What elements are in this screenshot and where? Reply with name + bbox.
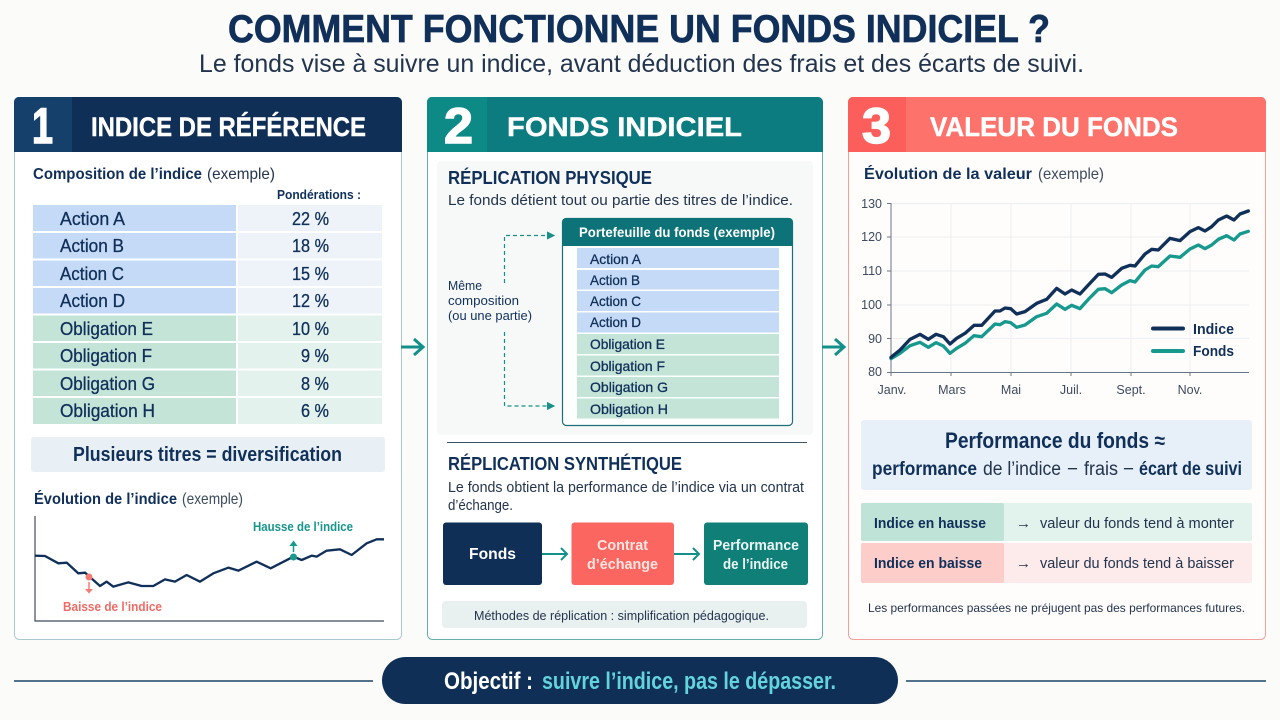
arrow: fonds to contrat — [542, 548, 567, 560]
diversification callout: Plusieurs titres = diversification — [73, 444, 342, 466]
falling index row: Indice en baisse — [874, 555, 982, 572]
decline marker: Baisse de l’indice — [63, 599, 162, 614]
subtitle: Le fonds vise à suivre un indice, avant déduction des frais et des écarts de suivi. — [199, 50, 1084, 78]
composition table: 10 % — [292, 319, 329, 339]
disclaimer: Les performances passées ne préjugent pas des performances futures. — [868, 601, 1245, 615]
rise marker — [253, 519, 353, 560]
flow box: performance de l'indice — [704, 522, 808, 585]
fund portfolio table: Obligation F — [590, 358, 665, 374]
index series — [891, 211, 1248, 357]
falling index row — [861, 543, 1252, 583]
y-axis labels: 100 — [861, 298, 882, 312]
fund portfolio table — [562, 218, 793, 426]
y-axis labels: 120 — [861, 230, 882, 244]
performance formula box: performance — [872, 459, 977, 480]
note on replication methods — [442, 601, 807, 628]
composition table: Action B — [60, 236, 124, 256]
index evolution heading — [34, 489, 243, 508]
arrow: panel 1 to panel 2 — [401, 339, 423, 355]
panel header 2 — [427, 97, 823, 154]
index line chart — [35, 516, 384, 621]
same composition label: (ou une partie) — [448, 308, 532, 323]
fund portfolio table: Obligation E — [590, 336, 665, 352]
physical replication section — [437, 161, 813, 435]
rising index row: → — [1016, 515, 1031, 532]
performance formula box: − — [1067, 459, 1078, 480]
value evolution heading — [864, 164, 1104, 183]
x-axis labels — [878, 383, 1202, 397]
objective banner: suivre l’indice, pas le dépasser. — [542, 668, 836, 695]
y-axis labels: 130 — [861, 197, 882, 211]
y-axis labels — [861, 197, 882, 379]
composition table: 6 % — [301, 401, 329, 421]
performance formula box: − — [1123, 459, 1134, 480]
composition table: Obligation F — [60, 346, 152, 366]
fund portfolio table: Obligation G — [590, 379, 668, 395]
panel header 1: INDICE DE RÉFÉRENCE — [91, 111, 366, 142]
panel header 2: FONDS INDICIEL — [507, 112, 742, 142]
flow box: fonds — [443, 522, 542, 585]
same composition label: composition — [448, 293, 519, 308]
chart legend: Indice — [1193, 322, 1234, 338]
chart legend: Fonds — [1193, 344, 1234, 360]
x-axis labels: Janv. — [878, 383, 906, 397]
physical replication section: Le fonds détient tout ou partie des titres de l’indice. — [448, 192, 793, 209]
composition table: 18 % — [292, 236, 329, 256]
composition table: 8 % — [301, 374, 329, 394]
composition table: 22 % — [292, 209, 329, 229]
x-axis labels: Juil. — [1060, 383, 1082, 397]
composition table — [33, 205, 382, 424]
dashed connector arrows — [504, 236, 554, 406]
panel: valeur du fonds — [848, 97, 1266, 640]
flow box: performance de l'indice: de l’indice — [723, 556, 788, 573]
x-axis labels: Mai — [1001, 383, 1021, 397]
fund portfolio table: Action D — [590, 314, 641, 330]
composition table: Obligation E — [60, 319, 153, 339]
fund portfolio table: Obligation H — [590, 401, 668, 417]
composition heading: (exemple) — [207, 166, 275, 183]
falling index row: → — [1016, 555, 1031, 572]
composition table: Action A — [60, 209, 125, 229]
physical replication section: RÉPLICATION PHYSIQUE — [448, 167, 652, 188]
y-axis labels: 110 — [862, 264, 882, 278]
panel: fonds indiciel — [427, 97, 823, 640]
performance formula box: frais — [1084, 459, 1118, 480]
synthetic replication section: Le fonds obtient la performance de l’indice via un contrat — [448, 480, 804, 496]
synthetic replication section: RÉPLICATION SYNTHÉTIQUE — [448, 453, 682, 474]
panel header 3 — [848, 97, 1266, 154]
y-axis labels: 80 — [868, 365, 882, 379]
objective banner — [382, 657, 898, 704]
synthetic replication section — [442, 453, 808, 628]
composition table: 9 % — [301, 346, 329, 366]
performance formula box: écart de suivi — [1139, 459, 1242, 480]
fund portfolio table: Action C — [590, 293, 641, 309]
panel header 1 — [14, 97, 402, 154]
same composition label — [448, 278, 532, 323]
objective banner: Objectif : — [444, 668, 533, 695]
weights heading: Pondérations : — [277, 187, 361, 202]
diversification callout — [31, 437, 385, 472]
arrow: panel 2 to panel 3 — [822, 339, 844, 355]
performance formula box: de l’indice — [983, 459, 1061, 480]
composition table: Action D — [60, 291, 125, 311]
arrow: contrat to performance — [674, 548, 699, 560]
decline marker — [63, 574, 162, 614]
note on replication methods: Méthodes de réplication : simplification pédagogique. — [474, 608, 769, 623]
same composition label: Même — [448, 278, 482, 293]
value evolution heading: Évolution de la valeur — [864, 164, 1032, 183]
panel header 2: 2 — [444, 98, 473, 154]
flow box: contrat d'échange — [572, 522, 674, 585]
title: COMMENT FONCTIONNE UN FONDS INDICIEL ? — [228, 8, 1050, 51]
rising index row — [861, 503, 1252, 541]
composition table: 12 % — [292, 291, 329, 311]
panel: indice de référence — [14, 97, 402, 640]
fund portfolio table: Action B — [590, 272, 640, 288]
composition table: Action C — [60, 264, 124, 284]
panel header 3: VALEUR DU FONDS — [930, 112, 1178, 142]
synthetic replication section: d’échange. — [448, 498, 513, 514]
x-axis labels: Mars — [938, 383, 966, 397]
composition table: Obligation G — [60, 374, 155, 394]
value evolution heading: (exemple) — [1038, 166, 1104, 183]
index evolution heading: Évolution de l’indice — [34, 489, 177, 508]
performance formula box — [861, 420, 1252, 490]
performance formula box: Performance du fonds ≈ — [945, 428, 1165, 453]
fund portfolio table: Action A — [590, 251, 642, 267]
composition heading: Composition de l’indice — [33, 166, 202, 183]
rising index row: valeur du fonds tend à monter — [1040, 515, 1234, 532]
x-axis labels: Sept. — [1116, 383, 1146, 397]
rise marker: Hausse de l’indice — [253, 519, 353, 534]
x-axis labels: Nov. — [1178, 383, 1202, 397]
composition table: Obligation H — [60, 401, 155, 421]
chart legend — [1153, 322, 1234, 360]
composition table: 15 % — [292, 264, 329, 284]
value line chart — [861, 197, 1249, 397]
flow box: contrat d'échange: Contrat — [597, 537, 648, 554]
y-axis labels: 90 — [868, 332, 882, 346]
fund portfolio table: Portefeuille du fonds (exemple) — [579, 224, 775, 240]
rising index row: Indice en hausse — [874, 515, 986, 532]
panel header 1: 1 — [32, 98, 53, 154]
index evolution heading: (exemple) — [182, 491, 243, 508]
fund series — [891, 231, 1248, 359]
flow box: fonds: Fonds — [469, 546, 516, 563]
panel header 3: 3 — [862, 98, 891, 154]
flow box: performance de l'indice: Performance — [713, 537, 799, 554]
flow box: contrat d'échange: d’échange — [587, 556, 658, 573]
falling index row: valeur du fonds tend à baisser — [1040, 555, 1234, 572]
